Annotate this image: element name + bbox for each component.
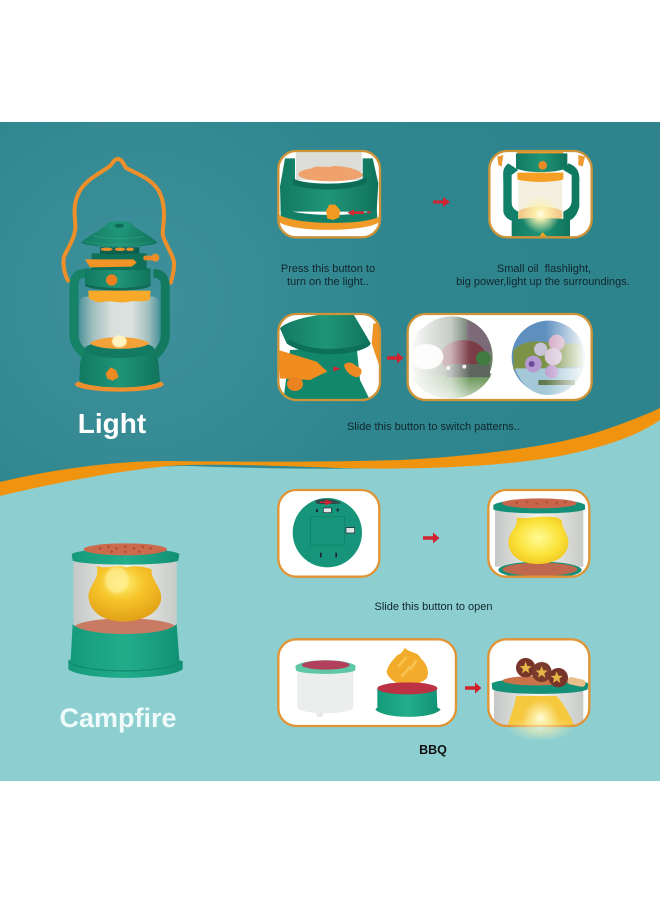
caption: press button: [281, 263, 375, 288]
campfire section background: [0, 418, 660, 781]
orange wave divider: [0, 408, 660, 496]
caption: slide to open: Slide this button to open: [374, 601, 493, 613]
lantern glass: [79, 297, 159, 350]
pattern: ladybug projection: [410, 316, 493, 399]
lantern collar: [88, 291, 151, 302]
caption: press button: Press this button to: [281, 263, 375, 275]
lantern knob: [106, 367, 119, 381]
heading: Campfire: Campfire: [59, 703, 177, 733]
lantern upper body: [85, 268, 151, 288]
lantern base: [75, 377, 164, 392]
campfire lid: [72, 548, 179, 565]
lantern handle: [63, 159, 174, 283]
campfire product image: [68, 543, 183, 678]
lantern roof: [81, 221, 157, 247]
arrow: press to lit: [433, 197, 450, 207]
campfire flame: [88, 566, 161, 622]
campfire grill bottom: [73, 618, 177, 638]
lantern product image: [63, 159, 174, 392]
lantern sliders: [85, 259, 137, 267]
light section background: [0, 122, 660, 492]
panel: slider close-up: [278, 313, 382, 400]
part: flame on green base: [375, 648, 441, 717]
part: clear cylinder with grill lid: [295, 660, 356, 717]
caption: small oil flashlight: big power,light up the surroundings.: [456, 276, 630, 288]
glow under BBQ panel: [507, 716, 574, 741]
arrow: parts to BBQ: [465, 682, 482, 694]
panel: BBQ: [488, 639, 589, 741]
caption: small oil flashlight: Small oil flashlight,: [497, 263, 591, 275]
panel: press button close-up: [278, 151, 380, 237]
caption: slide to switch patterns: Slide this button to switch patterns..: [347, 421, 520, 433]
heading: Light: Light: [78, 408, 146, 439]
panel: lit campfire: [488, 490, 589, 578]
arrow: underside to lit campfire: [423, 532, 440, 544]
panel: campfire underside: [278, 490, 379, 577]
arrow: slider to patterns: [387, 352, 404, 364]
lantern side arms: [74, 273, 90, 357]
panel: campfire parts: [278, 639, 456, 726]
caption: BBQ: BBQ: [419, 743, 447, 757]
caption: small oil flashlight: [456, 263, 630, 288]
pattern: flower projection: [512, 321, 585, 395]
panel: lit lantern close-up: [489, 151, 592, 238]
campfire base: [68, 624, 183, 678]
campfire glass: [73, 560, 177, 628]
panel: projection patterns: [408, 314, 592, 400]
caption: press button: turn on the light..: [287, 276, 369, 288]
